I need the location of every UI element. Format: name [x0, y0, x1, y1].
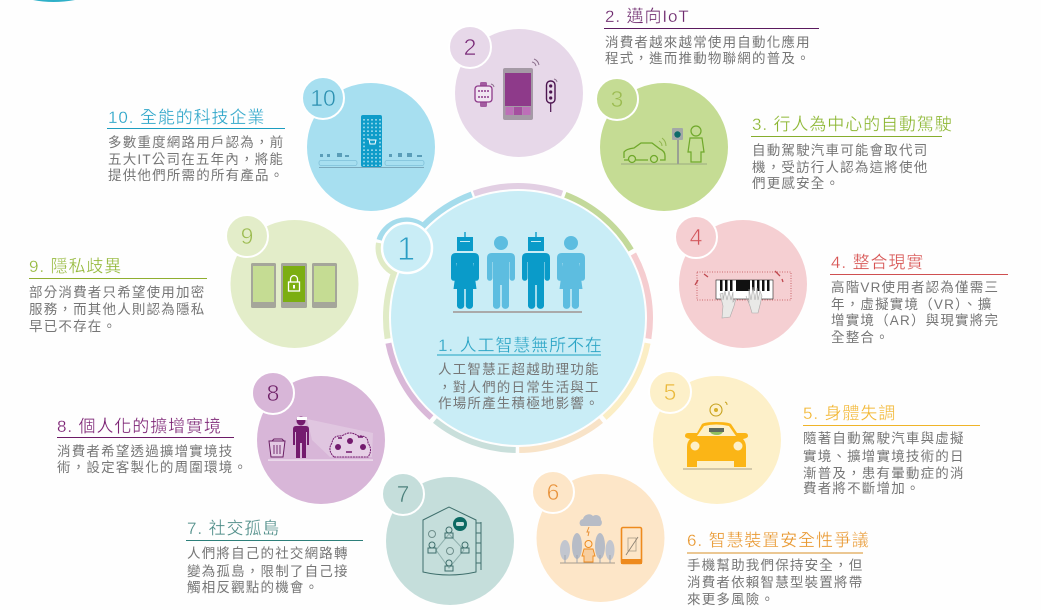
icon: robots and people: [451, 232, 585, 313]
text: section 9: 部分消費者只希望使用加密: [29, 284, 205, 300]
text: section 5: 5. 身體失調: [803, 404, 896, 423]
icon: storm, person and phone: [560, 514, 642, 564]
panel: circle 9 privacy: [226, 215, 358, 348]
icon: person with AR view, trash can and bush: [268, 416, 373, 461]
text: section 9: [29, 257, 207, 334]
panel: central circle 1: [379, 186, 650, 450]
text: section 7: [186, 519, 363, 595]
text block 1: ，對人們的日常生活與工: [438, 380, 600, 395]
number badge 4: 4: [690, 224, 703, 250]
text: section 5: 漸普及，患有暈動症的消: [803, 466, 965, 481]
text block 1: 人工智慧正超越助理功能: [438, 362, 600, 377]
number badge 5: 5: [664, 379, 676, 405]
text: section 4: 全整合。: [831, 330, 890, 345]
heading 1: 1. 人工智慧無所不在: [438, 336, 603, 355]
text: section 9: 早已不存在。: [29, 319, 117, 334]
text: section 7: 觸相反觀點的機會。: [187, 580, 319, 595]
text: section 10: 多數重度網路用戶認為，前: [108, 134, 284, 150]
text: section 2: [604, 7, 819, 66]
text: section 6: 6. 智慧裝置安全性爭議: [687, 531, 870, 550]
text: section 7: 人們將自己的社交網路轉: [187, 545, 349, 561]
text: section 5: 實境、擴增實境技術的日: [803, 448, 965, 464]
icon: building with store shelves: [319, 115, 424, 168]
text: section 8: 術，設定客製化的周圍環境。: [57, 459, 248, 475]
panel: circle 7 social islands: [382, 473, 514, 605]
text block 1: 作場所產生積極地影響。: [438, 395, 600, 411]
number badge 9: 9: [241, 223, 253, 249]
central disc: [391, 191, 645, 445]
panel: circle 2 IoT: [449, 26, 583, 157]
text: section 8: 消費者希望透過擴增實境技: [57, 443, 233, 459]
text: section 5: 費者將不斷增加。: [803, 481, 921, 496]
text: section 10: 提供他們所需的所有產品。: [108, 167, 284, 183]
text: section 2: 2. 邁向IoT: [605, 7, 690, 26]
panel: circle 5 motion sickness: [649, 371, 781, 504]
segmented ring: [379, 186, 650, 450]
text: section 10: 五大IT公司在五年內，將能: [108, 152, 284, 167]
number badge 8: 8: [267, 380, 279, 406]
number badge 3: 3: [611, 86, 623, 112]
text: section 8: 8. 個人化的擴增實境: [57, 417, 222, 436]
panel: circle 3 autonomous driving: [596, 78, 728, 211]
number badge 7: 7: [397, 481, 409, 507]
icon: network island: [423, 507, 481, 575]
text: section 5: 隨著自動駕駛汽車與虛擬: [803, 431, 965, 446]
panel: circle 4 integrated reality: [675, 216, 807, 348]
panel: circle 10 tech companies: [302, 77, 435, 211]
text: section 4: 增實境（AR）與現實將完: [831, 312, 999, 328]
text: section 7: 變為孤島，限制了自己接: [187, 563, 349, 579]
text: section 3: 3. 行人為中心的自動駕駛: [752, 115, 953, 134]
text: section 3: [751, 115, 953, 191]
text: section 4: 4. 整合現實: [831, 253, 924, 272]
icon: car, signal and pedestrian: [621, 126, 707, 164]
text: section 7: 7. 社交孤島: [187, 519, 280, 538]
text: section 6: [687, 531, 870, 607]
text: section 9: 9. 隱私歧異: [29, 257, 122, 276]
text: section 5: [803, 404, 980, 496]
text: section 2: 程式，進而推動物聯網的普及。: [605, 51, 811, 66]
text: section 10: [107, 108, 285, 183]
text: section 3: 們更感安全。: [752, 175, 840, 191]
text: section 9: 服務，而其他人則認為隱私: [29, 302, 205, 317]
text: section 3: 自動駕駛汽車可能會取代司: [752, 143, 928, 158]
text: section 4: [830, 253, 1008, 345]
icon: piano keyboard and hands: [695, 271, 791, 318]
text: section 10: 10. 全能的科技企業: [108, 108, 265, 127]
number badge 1: [382, 223, 432, 273]
number badge 6: 6: [547, 479, 559, 505]
text: section 6: 消費者依賴智慧型裝置將帶: [687, 575, 863, 590]
text: section 6: 來更多風險。: [687, 592, 775, 607]
text: section 4: 高階VR使用者認為僅需三: [831, 279, 999, 295]
text: section 4: 年，虛擬實境（VR）、擴: [831, 296, 992, 312]
icon: three phones with lock: [251, 263, 337, 308]
top-left cropped teal arc: [33, 0, 75, 2]
text: section 8: [57, 417, 248, 475]
number badge 2: 2: [464, 34, 476, 60]
icon: yellow car: [683, 402, 752, 470]
panel: circle 8 personal AR: [252, 372, 385, 504]
text block 1: [438, 362, 600, 411]
text: section 2: 消費者越來越常使用自動化應用: [605, 34, 811, 50]
panel: circle 6 device safety: [532, 471, 664, 602]
text: section 6: 手機幫助我們保持安全，但: [687, 558, 863, 573]
text: section 3: 機，受訪行人認為這將使他: [752, 159, 928, 175]
icon: watch, phone and traffic light: [475, 59, 557, 120]
number badge 1: 1: [397, 230, 415, 267]
number badge 10: 10: [310, 85, 336, 111]
